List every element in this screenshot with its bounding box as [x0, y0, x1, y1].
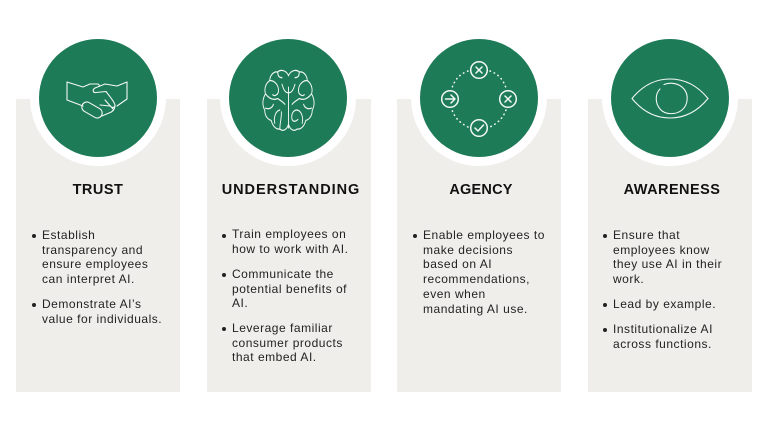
text block: agency bullets: make decisions	[423, 243, 513, 257]
panel: awareness	[588, 99, 752, 392]
text block: understanding bullets: potential benefits of	[232, 282, 347, 296]
text block: trust bullets: Establish	[42, 228, 95, 242]
text block: awareness bullets: employees know	[613, 243, 710, 257]
text block: understanding bullets: Leverage familiar	[232, 321, 333, 335]
text block: awareness bullets	[603, 228, 722, 351]
icon: handshake	[66, 81, 128, 119]
green circle: trust	[39, 39, 157, 157]
text block: awareness bullets: across functions.	[613, 337, 712, 351]
text block: agency bullets: based on AI	[423, 257, 492, 271]
white ring: awareness	[602, 30, 738, 166]
text block: awareness bullets: Ensure that	[613, 228, 680, 242]
text block: awareness bullets: they use AI in their	[613, 257, 722, 271]
text block: trust bullets	[32, 228, 162, 326]
text block: agency bullets	[413, 228, 545, 316]
text block: awareness bullets: Institutionalize AI	[613, 322, 713, 336]
text block: agency bullets: recommendations,	[423, 272, 530, 286]
green circle: understanding	[229, 39, 347, 157]
white ring: agency	[411, 30, 547, 166]
text block: understanding bullets: AI.	[232, 296, 248, 310]
text block: agency bullets: mandating AI use.	[423, 302, 528, 316]
text block: trust bullets: Demonstrate AI’s	[42, 297, 141, 311]
white ring: understanding	[220, 30, 356, 166]
text block: understanding bullets: how to work with AI.	[232, 242, 348, 256]
text block: understanding bullets: that embed AI.	[232, 350, 317, 364]
text block: awareness bullets: Lead by example.	[613, 297, 716, 311]
heading: agency: AGENCY	[449, 182, 513, 198]
text block: trust bullets: transparency and	[42, 243, 143, 257]
text block: understanding bullets: consumer products	[232, 336, 343, 350]
text block: agency bullets: Enable employees to	[423, 228, 545, 242]
panel: understanding	[207, 99, 371, 392]
panel: trust	[16, 99, 180, 392]
text block: awareness bullets: work.	[613, 272, 644, 286]
icon: eye	[631, 78, 709, 118]
text block: understanding bullets: Communicate the	[232, 267, 334, 281]
heading: awareness: AWARENESS	[624, 182, 720, 198]
heading: trust: TRUST	[73, 182, 123, 198]
white ring: trust	[30, 30, 166, 166]
green circle: agency	[420, 39, 538, 157]
heading: understanding: UNDERSTANDING	[222, 182, 360, 198]
panel: agency	[397, 99, 561, 392]
text block: trust bullets: ensure employees	[42, 257, 148, 271]
text block: understanding bullets: Train employees on	[232, 227, 346, 241]
text block: trust bullets: value for individuals.	[42, 312, 162, 326]
text block: agency bullets: even when	[423, 287, 486, 301]
green circle: awareness	[611, 39, 729, 157]
text block: trust bullets: can interpret AI.	[42, 272, 135, 286]
icon: brain	[262, 70, 315, 131]
text block: understanding bullets	[222, 227, 348, 364]
icon: decision loop	[440, 61, 518, 137]
